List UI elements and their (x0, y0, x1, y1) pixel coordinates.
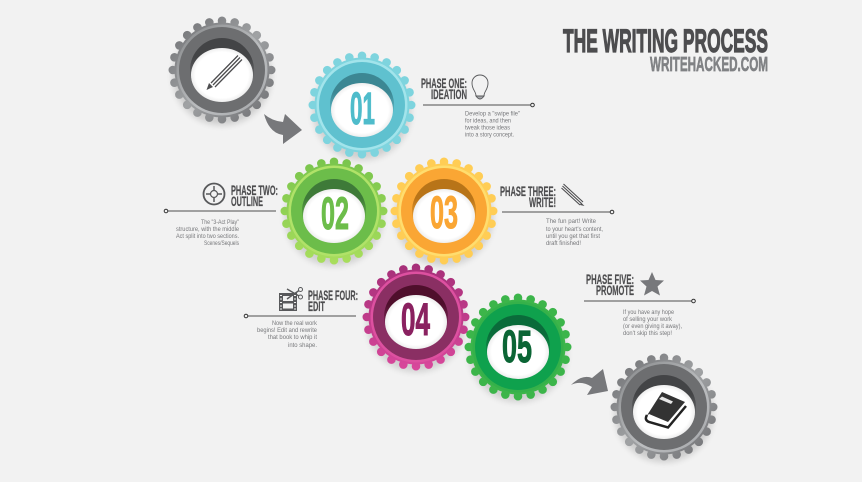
gear: 02 (285, 162, 383, 266)
icon: star (640, 272, 664, 296)
panel: phase three: PHASE THREE: (500, 184, 556, 199)
icon: pencil (206, 56, 242, 90)
panel: phase one (421, 75, 534, 138)
panel: phase five (584, 272, 695, 337)
panel: phase one: PHASE ONE: (421, 76, 467, 91)
panel: phase three: draft finished! (546, 240, 581, 247)
panel: phase one: Develop a "swipe file" (465, 110, 520, 118)
arrow: phase five to finish (571, 369, 608, 395)
panel: phase one: IDEATION (431, 87, 467, 102)
panel: phase two (164, 183, 278, 247)
panel: phase three: The fun part! Write (546, 218, 596, 225)
panel: phase two: PHASE TWO: (231, 183, 278, 198)
panel: phase two: structure, with the middle (176, 226, 239, 233)
panel: phase one: for ideas, and then (465, 118, 511, 124)
panel: phase three: WRITE! (529, 195, 556, 210)
panel: phase one: into a story concept. (465, 132, 514, 138)
gear: start, pencil (173, 21, 271, 125)
panel: phase four: that book to whip it (268, 334, 317, 341)
panel: phase one: tweak those ideas (465, 124, 510, 132)
gear: 05: 05 (502, 321, 532, 372)
title: WRITEHACKED.COM (650, 53, 768, 76)
gear: 03: 03 (430, 187, 458, 238)
panel: phase five: PROMOTE (596, 283, 634, 298)
panel: phase four: into shape. (288, 342, 317, 349)
panel: phase four: PHASE FOUR: (308, 288, 358, 303)
icon: pencil (562, 184, 584, 206)
icon: light bulb (472, 75, 488, 99)
panel: phase four: EDIT (308, 299, 325, 314)
gear: 01: 01 (350, 83, 375, 134)
panel: phase five: (or even giving it away), (623, 323, 682, 330)
gear: 02: 02 (321, 188, 349, 239)
gear: finish, book (615, 358, 713, 462)
panel: phase four (244, 288, 358, 349)
panel: phase three: until you get that first (546, 233, 600, 240)
panel: phase two: Act split into two sections. (176, 233, 239, 240)
panel: phase three: to your heart's content, (546, 226, 603, 233)
icon: film and scissors (279, 288, 302, 311)
gear: 04: 04 (401, 294, 430, 345)
arrow: start to phase one (264, 114, 302, 144)
panel: phase five: If you have any hope (623, 309, 674, 316)
panel: phase five: don't skip this step! (623, 330, 672, 337)
gear: 03 (395, 162, 493, 266)
panel: phase five: of selling your work (623, 316, 673, 323)
panel: phase two: OUTLINE (231, 194, 263, 209)
panel: phase five: PHASE FIVE: (586, 272, 634, 287)
gear: 05 (469, 298, 567, 402)
gear: 04 (367, 268, 465, 372)
panel: phase two: Scenes/Sequels (204, 240, 239, 247)
panel: phase four: begins! Edit and rewrite (257, 327, 317, 334)
gear: 01 (313, 56, 411, 160)
panel: phase three (500, 184, 614, 247)
icon: book (646, 392, 686, 428)
icon: compass (204, 184, 224, 204)
panel: phase two: The "3-Act Play" (201, 219, 239, 226)
panel: phase four: Now the real work (272, 320, 318, 327)
title (563, 23, 768, 76)
